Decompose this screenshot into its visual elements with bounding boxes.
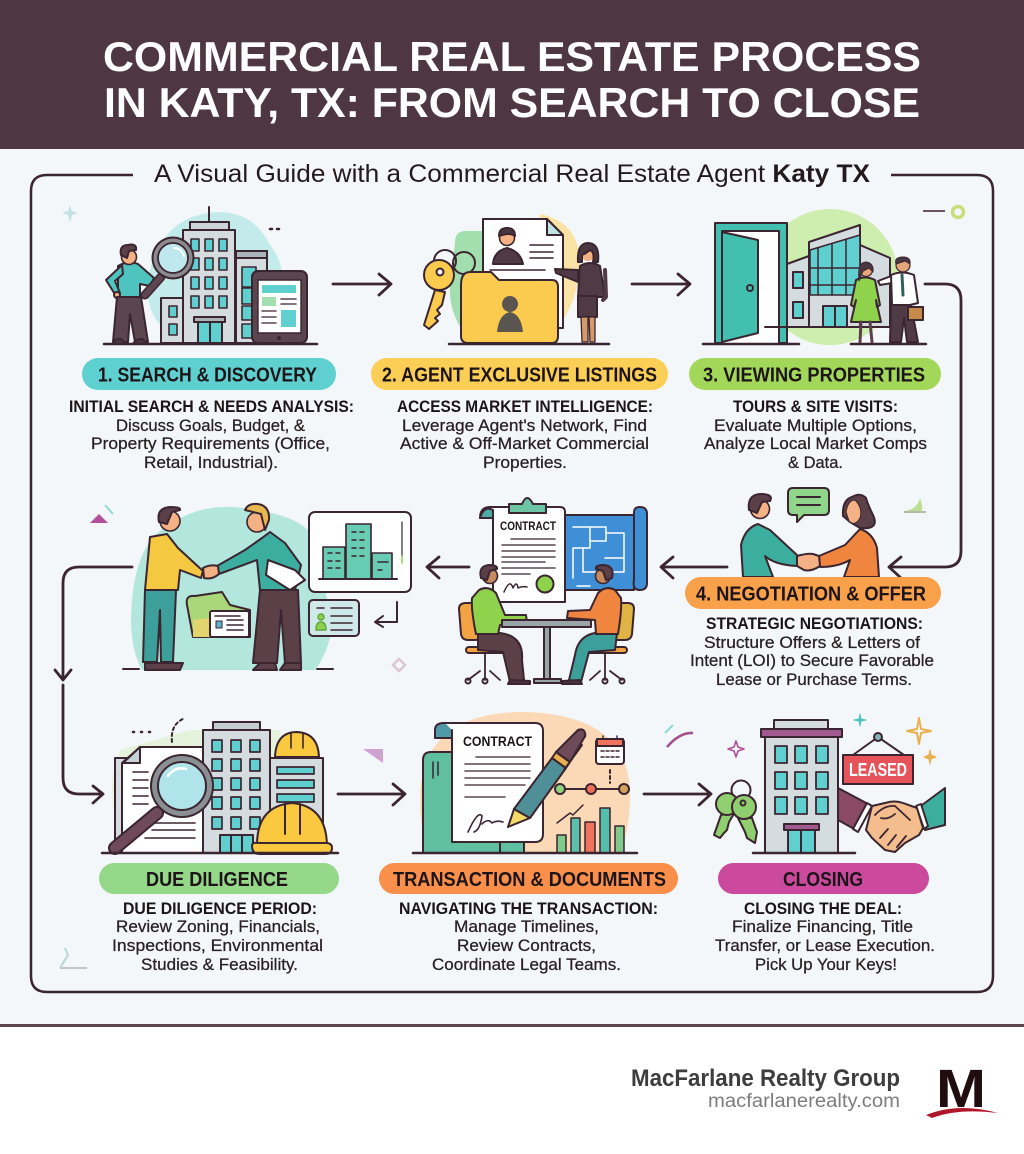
heading pill: agent exclusive listings: 2. AGENT EXCLUSIVE LISTINGS (382, 364, 657, 386)
panel: transaction and documents (379, 712, 678, 974)
heading pill: negotiation and offer: 4. NEGOTIATION & OFFER (696, 584, 927, 606)
text block: step 1 description: Discuss Goals, Budget, & (116, 417, 305, 435)
outer frame (31, 175, 993, 992)
illustration: contract, pen, calendar, bar chart: CONTRACT (463, 733, 532, 749)
arrow: handshake elbow down to due diligence (55, 567, 132, 803)
heading pill: agent exclusive listings (371, 358, 668, 390)
text block: step 2 description: Leverage Agent's Network, Find (402, 417, 647, 435)
text block: step 3 description: Analyze Local Market Comps (704, 435, 927, 453)
text block: step 2 description: Properties. (483, 454, 567, 472)
footer brand name and website: MacFarlane Realty Group (631, 1065, 900, 1092)
logo: M with red swoosh (926, 1059, 998, 1119)
arrow: due diligence to transaction (338, 784, 405, 805)
text block: step 1 description: INITIAL SEARCH & NEEDS ANALYSIS: (69, 398, 354, 416)
text block: closing description: CLOSING THE DEAL: (744, 900, 902, 918)
header banner with title (0, 0, 1024, 149)
subtitle: A Visual Guide with a Commercial Real Estate Agent Katy TX (154, 160, 870, 188)
heading pill: transaction and documents: TRANSACTION & DOCUMENTS (393, 869, 666, 891)
illustration: key, folder, agent (424, 214, 609, 344)
text block: step 2 description (397, 398, 653, 472)
illustration: documents, magnifier, building, hard hats (102, 718, 338, 854)
logo: M with red swoosh: M (936, 1059, 986, 1119)
illustration: keys, building, leased sign, handshake: LEASED (849, 760, 907, 780)
illustration: open door, building, two people (703, 209, 926, 345)
heading pill: due diligence: DUE DILIGENCE (146, 869, 288, 891)
header banner with title: IN KATY, TX: FROM SEARCH TO CLOSE (104, 79, 920, 126)
header banner with title: COMMERCIAL REAL ESTATE PROCESS (103, 33, 921, 80)
heading pill: closing: CLOSING (783, 869, 863, 891)
illustration: two people shaking hands with speech bubble (741, 488, 879, 577)
decorative accents (60, 205, 964, 968)
text block: step 2 description: Active & Off-Market Commercial (400, 435, 649, 453)
heading pill: due diligence (99, 863, 339, 894)
arrow: transaction to closing (644, 784, 711, 805)
illustration: contract, pen, calendar, bar chart (413, 712, 637, 853)
text block: due diligence description: Review Zoning, Financials, (116, 918, 320, 936)
heading pill: closing (718, 863, 929, 894)
text block: transaction description: Coordinate Legal Teams. (432, 956, 621, 974)
text block: step 3 description: & Data. (788, 454, 843, 472)
text block: step 4 description: STRATEGIC NEGOTIATIONS: (706, 615, 923, 633)
text block: step 1 description: Retail, Industrial). (144, 454, 278, 472)
arrow: step 3 elbow to step 4 (889, 284, 961, 578)
heading pill: negotiation and offer (685, 577, 941, 609)
text block: step 4 description: Structure Offers & Letters of (704, 634, 920, 652)
illustration: contract meeting at table (445, 0, 647, 684)
text block: step 4 description: Intent (LOI) to Secure Favorable (690, 652, 934, 670)
text block: due diligence description: Studies & Feasibility. (141, 956, 298, 974)
text block: step 1 description (69, 398, 354, 472)
text block: due diligence description: Inspections, Environmental (112, 937, 323, 955)
heading pill: search and discovery: 1. SEARCH & DISCOVERY (98, 364, 318, 386)
heading pill: viewing properties (689, 358, 941, 390)
text block: step 3 description: TOURS & SITE VISITS: (733, 398, 898, 416)
text block: step 3 description: Evaluate Multiple Options, (714, 417, 917, 435)
heading pill: search and discovery (82, 358, 336, 390)
text block: step 4 description (690, 615, 934, 689)
illustration: keys, building, leased sign, handshake (714, 714, 945, 853)
illustration: contract meeting at table: CONTRACT (500, 521, 556, 533)
footer band (0, 1024, 1024, 1154)
text block: step 3 description (704, 398, 927, 472)
text block: step 1 description: Property Requirements (Office, (91, 435, 330, 453)
text block: step 2 description: ACCESS MARKET INTELLIGENCE: (397, 398, 653, 416)
panel: closing (714, 714, 945, 974)
panel: step 2 agent exclusive listings (371, 214, 668, 472)
text block: step 4 description: Lease or Purchase Terms. (716, 671, 912, 689)
footer brand name and website: macfarlanerealty.com (708, 1091, 900, 1112)
arrow: step 1 to step 2 (333, 274, 391, 295)
panel: step 3 viewing properties (689, 209, 941, 472)
illustration: searching person, buildings and tablet (104, 207, 317, 344)
illustration: handshake with property cards (123, 504, 411, 670)
footer brand name and website (631, 1065, 900, 1112)
heading pill: viewing properties: 3. VIEWING PROPERTIES (703, 364, 925, 386)
arrow: step 2 to step 3 (632, 274, 690, 295)
text block: closing description: Transfer, or Lease Execution. (715, 937, 935, 955)
text block: transaction description: NAVIGATING THE TRANSACTION: (399, 900, 658, 918)
panel: due diligence (99, 718, 339, 974)
arrow: contract meeting to handshake (427, 557, 469, 578)
panel: step 4 negotiation and offer (685, 488, 941, 689)
text block: closing description: Finalize Financing, Title (732, 918, 913, 936)
text block: transaction description: Review Contracts, (457, 937, 596, 955)
panel: step 1 search and discovery (69, 207, 354, 472)
text block: transaction description (399, 900, 658, 974)
text block: transaction description: Manage Timelines, (454, 918, 599, 936)
text block: due diligence description: DUE DILIGENCE PERIOD: (123, 900, 317, 918)
heading pill: transaction and documents (379, 863, 678, 894)
text block: closing description: Pick Up Your Keys! (755, 956, 897, 974)
text block: closing description (715, 900, 935, 974)
text block: due diligence description (112, 900, 323, 974)
arrow: step 4 to contract meeting (661, 557, 727, 578)
